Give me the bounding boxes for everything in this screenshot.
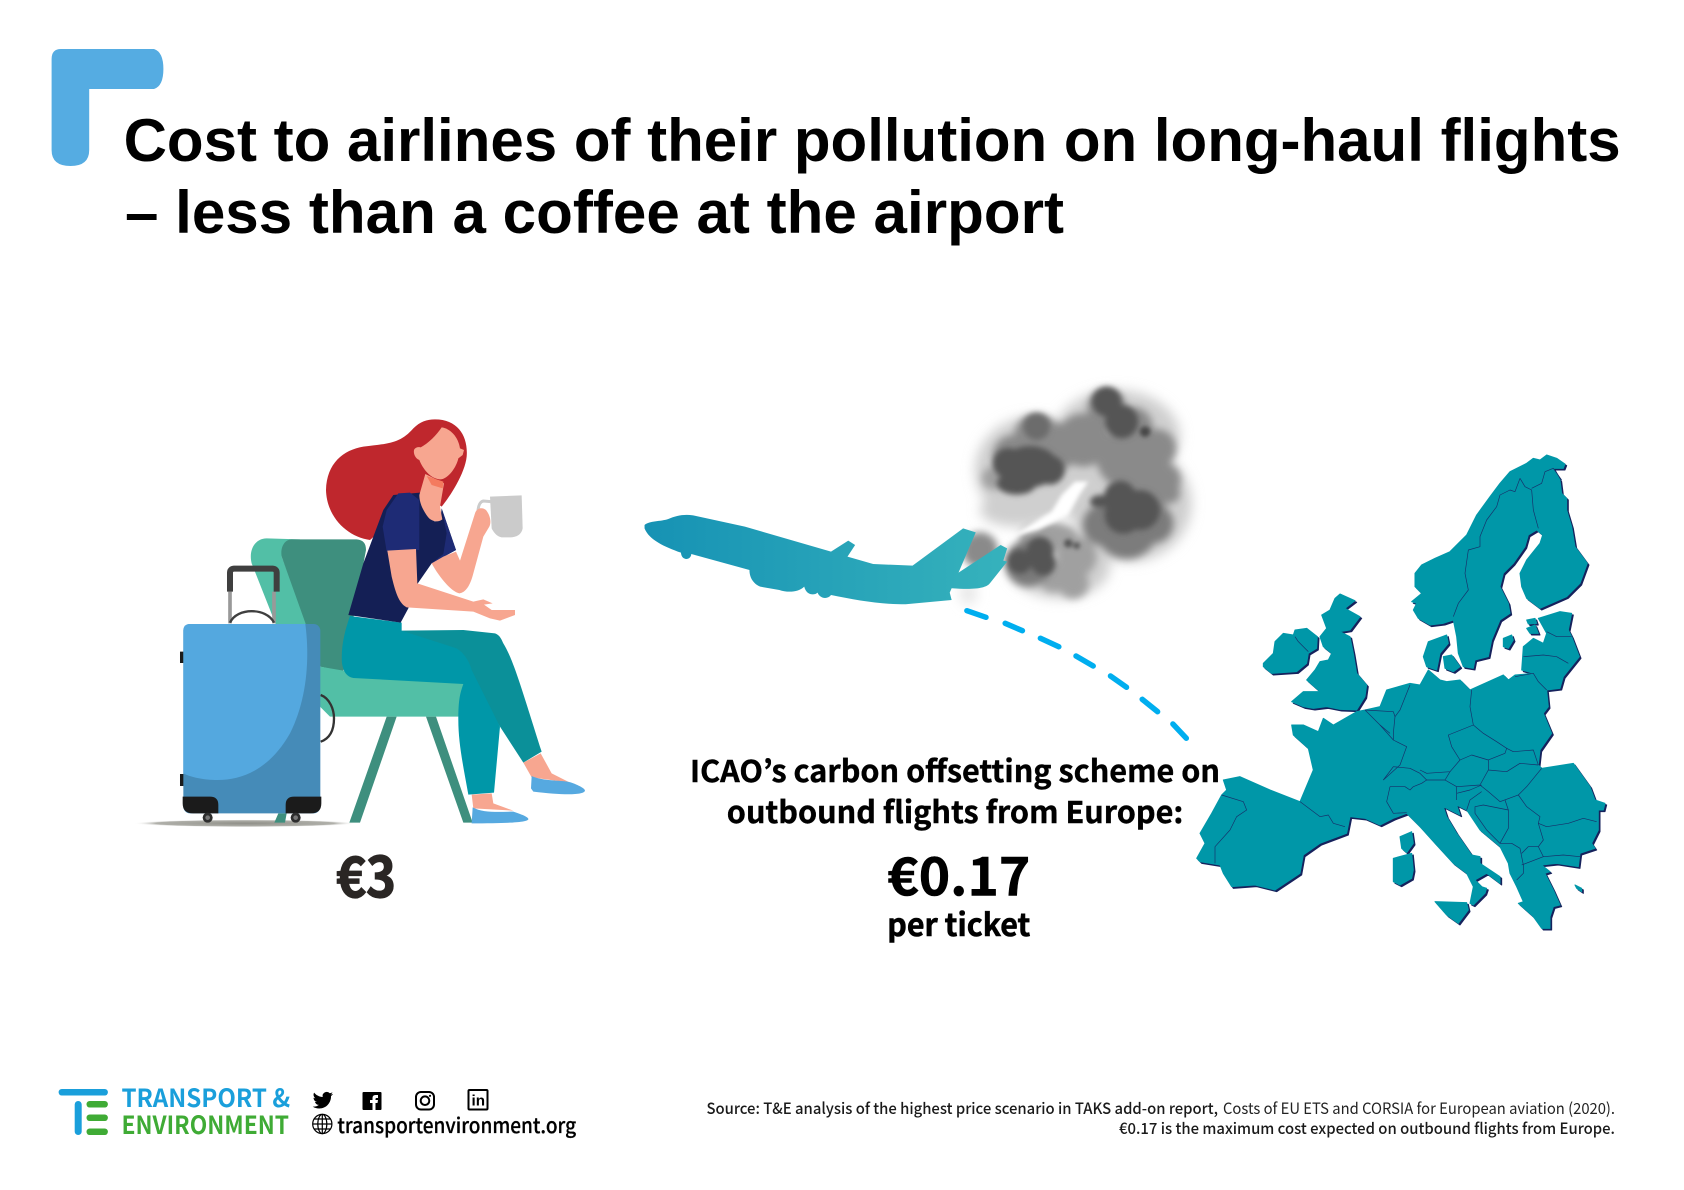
price: per ticket: €0.17: [887, 836, 1030, 910]
smoke cloud: [960, 387, 1192, 605]
hair: [326, 419, 467, 540]
country borders: [1215, 468, 1597, 880]
source note: [706, 1097, 1615, 1139]
logo wordmark: TRANSPORT &: [122, 1079, 290, 1115]
dashed flight path arrow: [967, 611, 1186, 738]
near leg: [342, 616, 500, 795]
map land: [1197, 455, 1605, 928]
callout: ICAO scheme: [690, 747, 1220, 832]
suitcase: [180, 569, 334, 823]
source note: Costs of EU ETS and CORSIA for European aviation (2020).: [1223, 1097, 1615, 1119]
resting arm: [387, 549, 515, 621]
shirt: [348, 493, 456, 623]
icon: instagram: [416, 1092, 434, 1110]
map shadow: [1198, 457, 1607, 930]
source note: €0.17 is the maximum cost expected on outbound flights from Europe.: [1119, 1117, 1615, 1139]
logo wordmark: ENVIRONMENT: [122, 1106, 289, 1142]
callout: ICAO scheme: outbound flights from Europe:: [727, 788, 1183, 832]
title: Cost to airlines of their pollution on long-haul flights: [124, 107, 1621, 174]
callout: ICAO scheme: ICAO’s carbon offsetting scheme on: [690, 747, 1220, 791]
logo icon: [59, 1089, 108, 1135]
neck shadow: [427, 476, 443, 488]
raised arm: [432, 508, 490, 593]
airplane: [645, 515, 1007, 604]
title: – less than a coffee at the airport: [125, 179, 1064, 246]
website address: transportenvironment.org: [337, 1110, 576, 1140]
source note: Source: T&E analysis of the highest price scenario in TAKS add-on report,: [706, 1097, 1218, 1119]
face: [414, 427, 464, 479]
far foot and shoe: [523, 753, 585, 794]
icon: linkedin: [468, 1090, 488, 1110]
logo wordmark: [122, 1079, 290, 1142]
price: per ticket: [887, 836, 1030, 945]
price label: coffee: €3: [336, 833, 396, 914]
icon: facebook: [362, 1092, 382, 1110]
icon: linkedin: in: [472, 1094, 485, 1110]
logo: Transport & Environment: [59, 1079, 290, 1142]
near foot and shoe: [472, 793, 528, 823]
neck: [419, 474, 444, 521]
icon: globe: [313, 1114, 332, 1134]
map of Europe: [1197, 455, 1607, 930]
sleeve highlight: [383, 493, 456, 563]
logo mark: corner bracket: [52, 49, 163, 166]
chair: [251, 538, 473, 823]
title: [124, 107, 1621, 246]
price: per ticket: per ticket: [887, 900, 1030, 945]
far leg: [402, 630, 542, 763]
icon: twitter: [313, 1092, 333, 1108]
mug: [478, 495, 523, 537]
ground shadow: [133, 820, 357, 827]
illustration: woman with coffee on chair and suitcase: [133, 419, 585, 827]
